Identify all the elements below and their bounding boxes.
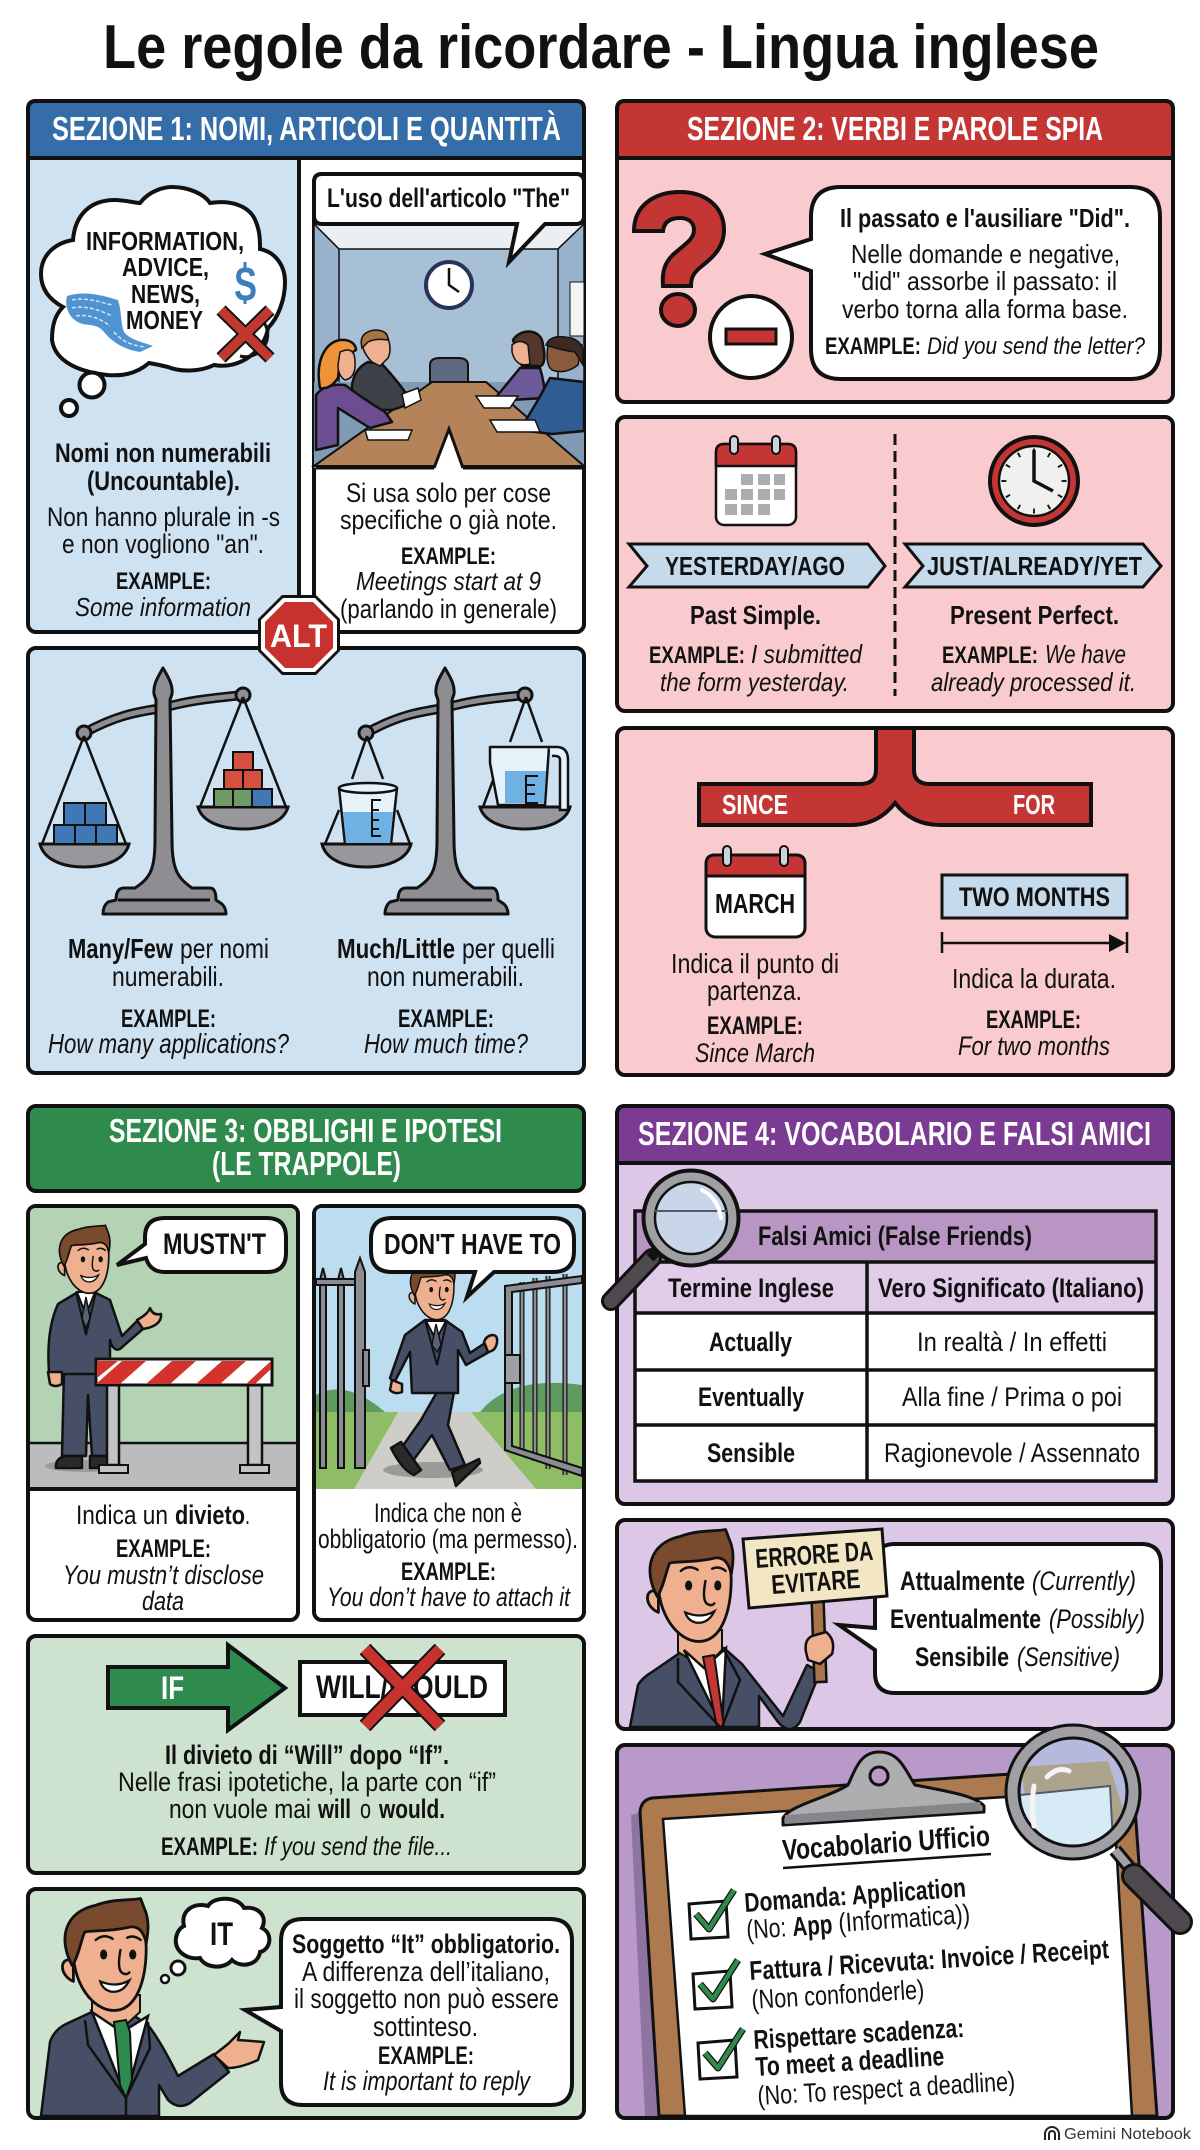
section 3 header: SEZIONE 3: OBBLIGHI E IPOTESI	[109, 1112, 502, 1149]
box: will would crossed out	[300, 1649, 505, 1726]
text: since: Since March	[695, 1038, 815, 1068]
arrow: duration	[942, 932, 1127, 953]
speech bubble: past and did: Did you send the letter?	[927, 333, 1146, 360]
text: don't have to: You don’t have to attach it	[327, 1582, 571, 1612]
section 3 header: (LE TRAPPOLE)	[212, 1145, 401, 1182]
checklist item: invoice: Fattura / Ricevuta: Invoice / Receipt	[749, 1934, 1110, 1986]
text: if rule: Il divieto di “Will” dopo “If”.	[165, 1740, 449, 1770]
panel: section 4 vocabulary	[611, 1106, 1173, 1504]
text: mustn't: divieto	[175, 1500, 245, 1530]
footer: Gemini Notebook mark: Gemini Notebook	[1064, 2126, 1191, 2143]
speech bubble: subject it	[245, 1919, 572, 2105]
speech bubble: past and did	[765, 187, 1160, 379]
speech bubble: subject it: EXAMPLE:	[378, 2042, 474, 2070]
text: if rule: would.	[378, 1794, 445, 1824]
illustration: meeting room	[314, 224, 584, 468]
text: past simple: Past Simple.	[690, 600, 821, 630]
icon: calendar	[716, 436, 796, 525]
text: many few	[48, 933, 289, 1059]
clipboard heading: Vocabolario Ufficio	[781, 1821, 991, 1867]
icon: calendar march: MARCH	[715, 888, 795, 919]
table: false friends: Actually	[709, 1327, 792, 1357]
text: don't have to: obbligatorio (ma permesso).	[318, 1524, 578, 1554]
ribbon: just already yet	[905, 544, 1161, 587]
text: since: partenza.	[707, 975, 802, 1006]
text: uncountable nouns: Non hanno plurale in -s	[47, 502, 280, 532]
speech bubble: subject it: It is important to reply	[323, 2066, 531, 2096]
text: don't have to	[318, 1498, 578, 1612]
text: for: For two months	[958, 1031, 1110, 1061]
text: past simple: I submitted	[751, 639, 863, 669]
ribbon: yesterday ago: YESTERDAY/AGO	[665, 551, 845, 581]
speech bubble: false friends: (Currently)	[1032, 1566, 1136, 1596]
speech bubble: past and did: verbo torna alla forma base.	[842, 294, 1128, 324]
text: many few: EXAMPLE:	[121, 1005, 216, 1033]
fork: since for: SINCE	[722, 789, 788, 820]
checklist item: deadline: (No: To respect a deadline)	[757, 2066, 1016, 2111]
text: much little: EXAMPLE:	[398, 1005, 494, 1033]
checklist item: application	[689, 1873, 971, 1945]
ribbon: just already yet: JUST/ALREADY/YET	[927, 551, 1142, 581]
table: false friends: Sensible	[707, 1438, 795, 1468]
table: false friends: Termine Inglese	[668, 1273, 834, 1303]
speech bubble: article The	[314, 174, 584, 262]
text: for	[952, 963, 1116, 1061]
text: uncountable nouns: Some information	[75, 592, 251, 622]
text: mustn't	[63, 1500, 264, 1616]
thought bubble: it	[161, 1899, 269, 1983]
text: present perfect: Present Perfect.	[950, 600, 1119, 630]
text: if rule: o	[360, 1794, 371, 1824]
speech bubble: past and did: EXAMPLE:	[825, 333, 921, 360]
text: if rule: EXAMPLE:	[161, 1833, 258, 1861]
thought bubble: it: IT	[210, 1916, 233, 1952]
thought cloud: uncountable nouns: NEWS,	[131, 279, 200, 309]
table: false friends: In realtà / In effetti	[917, 1327, 1107, 1357]
speech bubble: false friends: Eventualmente	[890, 1604, 1041, 1634]
text: for: Indica la durata.	[952, 963, 1116, 994]
panel: if and will	[28, 1636, 584, 1873]
sign: errore da evitare	[743, 1529, 887, 1608]
icon: ALT stop sign	[258, 595, 340, 675]
thought cloud: uncountable nouns: INFORMATION,	[86, 226, 244, 256]
text: use of the article: specifiche o già note.	[340, 505, 557, 535]
checklist item: application: (No:	[745, 1912, 787, 1945]
text: much little: non numerabili.	[367, 961, 524, 992]
text: many few: per nomi	[180, 933, 269, 964]
speech bubble: false friends: (Sensitive)	[1017, 1642, 1120, 1672]
text: mustn't: .	[245, 1500, 250, 1530]
thought cloud: uncountable nouns	[41, 187, 285, 416]
checklist item: application: (Informatica))	[837, 1899, 971, 1938]
section 3 header	[28, 1106, 584, 1191]
thought cloud: uncountable nouns: MONEY	[126, 305, 203, 335]
speech bubble: don't have to: DON'T HAVE TO	[384, 1229, 561, 1261]
text: much little: How much time?	[364, 1028, 528, 1059]
speech bubble: false friends: Attualmente	[900, 1566, 1025, 1596]
checklist item: deadline: To meet a deadline	[755, 2041, 945, 2082]
clipboard	[631, 1752, 1157, 2116]
table: false friends: Ragionevole / Assennato	[884, 1438, 1140, 1468]
text: mustn't: EXAMPLE:	[116, 1535, 211, 1563]
text: use of the article: EXAMPLE:	[401, 543, 496, 570]
checklist item: deadline: Rispettare scadenza:	[753, 2013, 965, 2055]
illustration: man walking through gate	[316, 1208, 582, 1489]
text: past simple: EXAMPLE:	[649, 642, 745, 669]
speech bubble: past and did: "did" assorbe il passato: il	[853, 266, 1117, 296]
text: present perfect: We have	[1045, 639, 1126, 669]
text: many few: Many/Few	[68, 933, 173, 964]
speech bubble: subject it: sottinteso.	[373, 2011, 478, 2042]
section 1 header: SEZIONE 1: NOMI, ARTICOLI E QUANTITÀ	[52, 110, 561, 147]
text: mustn't: data	[142, 1586, 184, 1616]
box: will would crossed out: WILL/WOULD	[316, 1669, 488, 1705]
panel: errors to avoid	[617, 1520, 1173, 1729]
fork: since for	[699, 728, 1091, 825]
text: mustn't: Indica un	[76, 1500, 168, 1530]
panel: past simple vs present perfect	[617, 417, 1173, 711]
text: uncountable nouns: Nomi non numerabili	[55, 438, 271, 468]
icon: minus circle	[710, 296, 792, 378]
panel: since vs for	[617, 728, 1173, 1075]
arrow: if: IF	[161, 1670, 184, 1706]
speech bubble: past and did: Nelle domande e negative,	[851, 239, 1120, 269]
sign: errore da evitare: ERRORE DA	[754, 1536, 874, 1574]
text: mustn't: You mustn’t disclose	[63, 1560, 264, 1590]
sub-panel: article The	[314, 174, 584, 632]
text: present perfect	[931, 600, 1136, 697]
text: for: EXAMPLE:	[986, 1006, 1081, 1034]
text: uncountable nouns: e non vogliono "an".	[62, 529, 264, 559]
panel: office vocabulary clipboard	[617, 1726, 1180, 2118]
panel: don't have to	[314, 1206, 584, 1620]
speech bubble: false friends	[839, 1544, 1161, 1693]
text: if rule: Nelle frasi ipotetiche, la parte con “if”	[118, 1767, 496, 1797]
table: false friends: Vero Significato (Italiano)	[878, 1273, 1144, 1303]
speech bubble: false friends: (Possibly)	[1049, 1604, 1145, 1634]
label box: two months	[942, 875, 1127, 918]
icon: large magnifying glass	[1007, 1726, 1180, 1922]
panel: many few much little	[28, 648, 584, 1073]
text: much little	[337, 933, 555, 1059]
text: don't have to: Indica che non è	[374, 1498, 522, 1528]
illustration: man thinking	[41, 1899, 264, 2116]
fork: since for: FOR	[1013, 789, 1055, 820]
label box: two months: TWO MONTHS	[959, 882, 1110, 912]
text: use of the article: Si usa solo per cose	[346, 478, 551, 508]
text: if rule: will	[317, 1794, 351, 1824]
text: uncountable nouns	[47, 438, 280, 622]
checklist item: invoice: (Non confonderle)	[751, 1974, 925, 2015]
speech bubble: subject it: il soggetto non può essere	[294, 1983, 559, 2014]
thought cloud: uncountable nouns: S	[234, 258, 257, 310]
panel: mustn't	[28, 1206, 298, 1620]
speech bubble: past and did: Il passato e l'ausiliare "Did".	[840, 203, 1130, 233]
speech bubble: don't have to	[371, 1218, 574, 1297]
panel: section 2 verbs	[617, 101, 1173, 402]
text: since: EXAMPLE:	[707, 1012, 803, 1040]
speech bubble: subject it: Soggetto “It” obbligatorio.	[292, 1929, 560, 1959]
icon: ALT stop sign: ALT	[270, 618, 327, 654]
text: much little: per quelli	[462, 933, 555, 964]
ribbon: yesterday ago	[629, 544, 885, 587]
text: if rule	[118, 1740, 496, 1861]
illustration: man holding sign	[630, 1530, 833, 1729]
speech bubble: subject it: A differenza dell’italiano,	[302, 1956, 550, 1987]
section 1 header	[28, 101, 584, 158]
icon: balance with blocks	[40, 668, 288, 914]
checklist item: application: Domanda: Application	[743, 1873, 967, 1918]
checklist item: deadline	[698, 2013, 1016, 2111]
text: use of the article: Meetings start at 9	[356, 566, 541, 596]
speech bubble: false friends: Sensibile	[915, 1642, 1009, 1672]
text: uncountable nouns: (Uncountable).	[87, 466, 240, 496]
arrow: if	[108, 1645, 285, 1730]
text: many few: How many applications?	[48, 1028, 289, 1059]
illustration: man at barrier	[28, 1208, 298, 1489]
section 2 header	[617, 101, 1173, 158]
table: false friends	[635, 1211, 1156, 1481]
sign: errore da evitare: EVITARE	[770, 1564, 861, 1600]
checklist item: application: App	[791, 1909, 833, 1942]
speech bubble: mustn't: MUSTN'T	[163, 1228, 266, 1261]
text: since: Indica il punto di	[671, 948, 839, 979]
text: much little: Much/Little	[337, 933, 455, 964]
icon: wall clock	[990, 437, 1078, 525]
text: uncountable nouns: EXAMPLE:	[116, 568, 211, 595]
text: if rule: non vuole mai	[169, 1794, 311, 1824]
text: use of the article: (parlando in generale)	[340, 594, 557, 624]
thought cloud: uncountable nouns: ADVICE,	[122, 252, 209, 282]
speech bubble: article The: L'uso dell'articolo "The"	[327, 183, 570, 213]
section 4 header	[617, 1106, 1173, 1163]
text: if rule: If you send the file...	[264, 1831, 452, 1861]
text: present perfect: already processed it.	[931, 667, 1136, 697]
text: use of the article	[340, 478, 557, 624]
text: many few: numerabili.	[112, 961, 224, 992]
text: since	[671, 948, 839, 1068]
table: false friends: Falsi Amici (False Friends)	[758, 1221, 1032, 1251]
table: false friends: Alla fine / Prima o poi	[902, 1382, 1122, 1412]
table: false friends: Eventually	[698, 1382, 804, 1412]
panel: subject it	[28, 1889, 584, 2118]
text: present perfect: EXAMPLE:	[942, 642, 1038, 669]
icon: calendar march	[706, 846, 805, 937]
checklist item: invoice	[693, 1934, 1110, 2015]
icon: magnifying glass on table	[611, 1171, 738, 1301]
icon: question mark	[634, 192, 724, 326]
icon: balance with liquids	[322, 668, 570, 914]
text: past simple	[649, 600, 863, 697]
speech bubble: mustn't	[117, 1218, 286, 1272]
text: past simple: the form yesterday.	[660, 667, 849, 697]
panel: section 1 nouns and articles	[28, 101, 584, 634]
text: don't have to: EXAMPLE:	[401, 1558, 496, 1586]
